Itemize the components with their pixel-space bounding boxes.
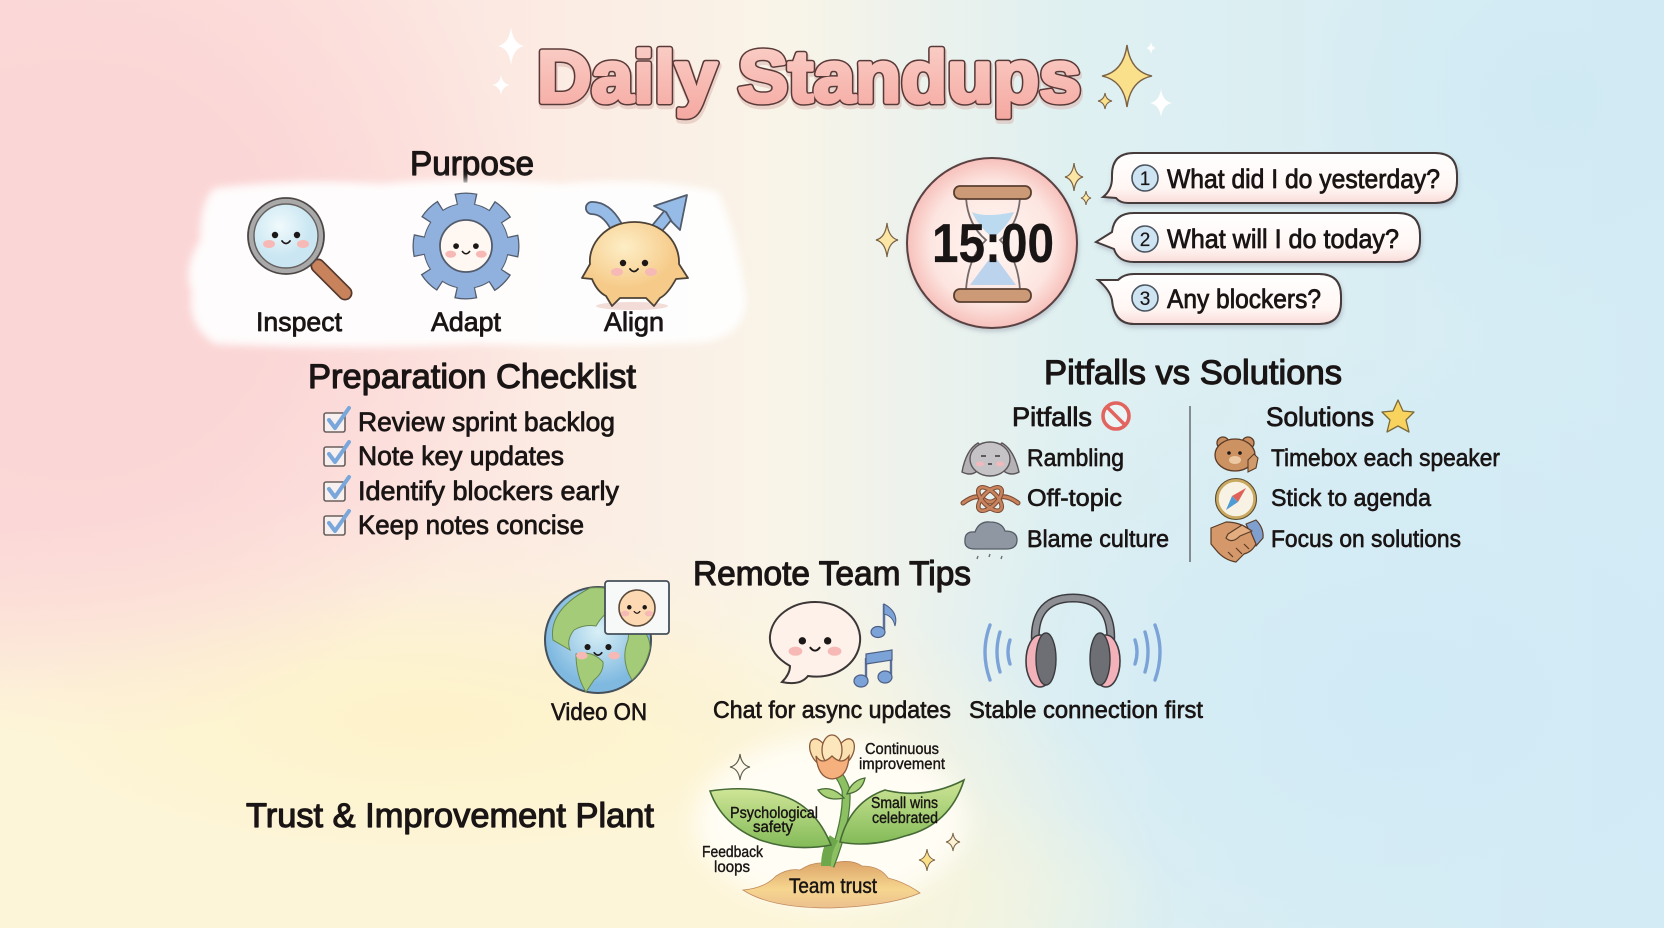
title: Daily Standups: Daily Standups — [537, 37, 1081, 118]
item: Identify blockers early: Identify blockers early — [358, 476, 619, 506]
label: Inspect: Inspect — [256, 307, 342, 337]
label: Video ON: Video ON — [551, 699, 647, 726]
heading: Pitfalls vs Solutions: Pitfalls vs Solutions — [1044, 354, 1342, 392]
subheading: Pitfalls: Pitfalls — [1012, 402, 1092, 432]
icon: knot — [963, 483, 1018, 515]
panel: trust plant — [695, 735, 967, 908]
timer value: 15:00 — [932, 212, 1054, 274]
panel background — [188, 180, 746, 347]
item: Blame culture: Blame culture — [1027, 526, 1169, 553]
soil mound — [743, 861, 920, 908]
heading: Purpose: Purpose — [410, 145, 534, 183]
item: Off-topic: Off-topic — [1027, 485, 1122, 512]
label: Continuous improvement: improvement — [859, 756, 946, 773]
soft glow behind plant — [695, 738, 967, 906]
callout: question 3 — [1098, 274, 1341, 324]
callout: question 1: 1 — [1140, 169, 1150, 190]
panel: purpose — [188, 180, 746, 347]
icon: compass — [1216, 478, 1256, 520]
icon: headphones with signal waves — [985, 598, 1160, 687]
icon: handshake — [1211, 520, 1263, 562]
label: Psychological safety: Psychological — [730, 805, 818, 822]
item: Timebox each speaker: Timebox each speaker — [1271, 445, 1500, 472]
icon: no sign — [1103, 403, 1129, 429]
title: Daily Standups: Daily Standups — [538, 40, 1082, 121]
heading: Trust & Improvement Plant: Trust & Improvement Plant — [246, 797, 655, 835]
item: Stick to agenda: Stick to agenda — [1271, 485, 1431, 512]
icon: rain cloud — [965, 522, 1017, 559]
icon: timer sparkles — [876, 163, 1091, 257]
panel: remote team tips — [545, 555, 1203, 726]
item: Keep notes concise: Keep notes concise — [358, 510, 584, 540]
item: Note key updates: Note key updates — [358, 441, 564, 471]
icon: title sparkles — [492, 27, 1172, 117]
icon: bear — [1215, 437, 1258, 472]
label: Chat for async updates: Chat for async updates — [713, 697, 951, 724]
label: Small wins celebrated: celebrated — [872, 810, 938, 827]
label: Adapt: Adapt — [431, 307, 501, 337]
callout: question 1: What did I do yesterday? — [1167, 164, 1440, 194]
callout: question 3: 3 — [1140, 289, 1150, 310]
icon: checkbox 2 — [324, 442, 349, 466]
callout: question 1 — [1103, 153, 1457, 203]
panel: 15 minute timer — [876, 158, 1091, 328]
label: Continuous improvement — [859, 741, 946, 773]
heading: Remote Team Tips: Remote Team Tips — [693, 555, 971, 593]
label: Team trust: Team trust — [789, 875, 877, 898]
heading: Preparation Checklist: Preparation Checklist — [308, 358, 637, 396]
label: Continuous improvement: Continuous — [865, 741, 939, 758]
right leaf — [840, 780, 964, 844]
label: Small wins celebrated: Small wins — [871, 795, 938, 812]
item: Rambling: Rambling — [1027, 445, 1124, 472]
item: Review sprint backlog: Review sprint backlog — [358, 407, 615, 437]
icon: sad bunny — [962, 442, 1019, 476]
icon: clock face with hourglass — [907, 158, 1077, 328]
callout: question 3: Any blockers? — [1167, 284, 1321, 314]
icon: plant sparkles — [730, 754, 960, 871]
icon: checkbox 4 — [324, 511, 349, 535]
label: Feedback loops: Feedback — [702, 844, 763, 861]
title: Daily Standups: Daily Standups — [537, 37, 1081, 118]
label: Psychological safety: safety — [753, 819, 793, 836]
icon: flower — [806, 735, 858, 779]
item: Focus on solutions: Focus on solutions — [1271, 526, 1461, 553]
label: Stable connection first: Stable connection first — [969, 697, 1203, 724]
panel: pitfalls vs solutions — [962, 354, 1500, 562]
icon: magnifier — [248, 198, 345, 293]
small leaves — [818, 778, 865, 799]
callout: question 2: What will I do today? — [1167, 224, 1399, 254]
icon: align blob with arrow — [582, 195, 688, 310]
label: Psychological safety — [730, 805, 818, 836]
callout: question 2 — [1096, 213, 1420, 262]
icon: star — [1382, 400, 1414, 432]
label: Feedback loops: loops — [714, 859, 750, 876]
icon: chat bubble with music notes — [770, 602, 896, 687]
callout: question 2: 2 — [1140, 230, 1150, 251]
label: Feedback loops — [702, 844, 763, 876]
label: Align: Align — [604, 307, 664, 337]
panel: preparation checklist — [308, 358, 637, 540]
icon: checkbox 3 — [324, 477, 349, 501]
stem — [826, 772, 846, 866]
icon: gear — [411, 191, 521, 301]
left leaf — [710, 789, 831, 848]
icon: checkbox 1 — [324, 408, 349, 432]
label: Small wins celebrated — [871, 795, 938, 827]
icon: globe with video window — [545, 581, 669, 693]
subheading: Solutions: Solutions — [1266, 402, 1374, 432]
